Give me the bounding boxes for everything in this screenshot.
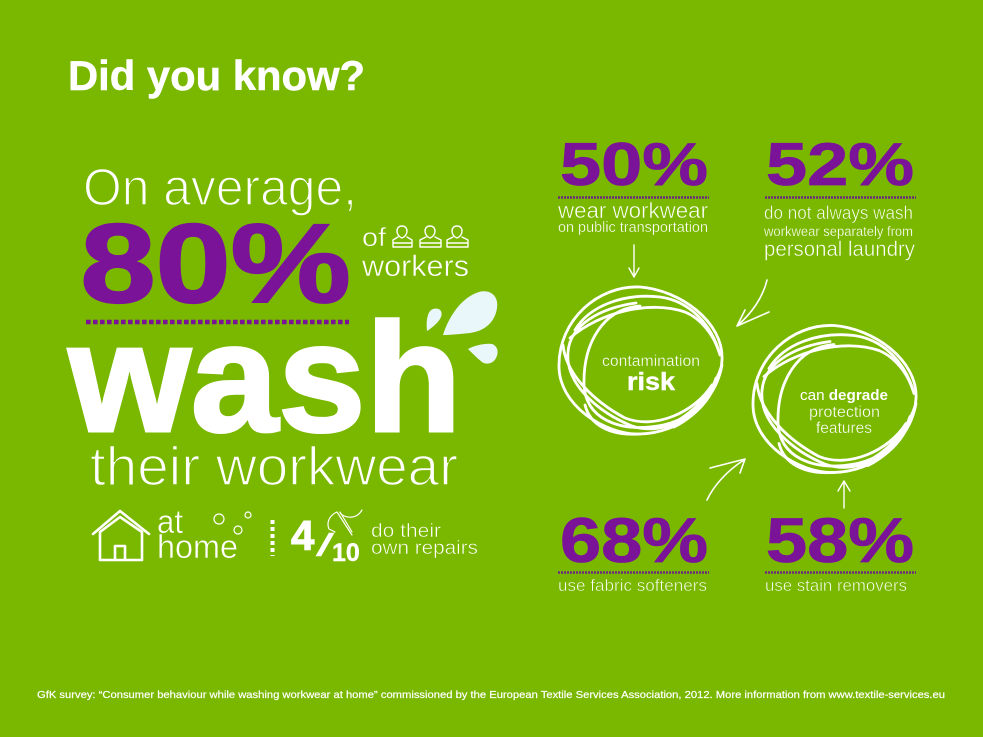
dotted separator: [270, 520, 274, 556]
icon: water drops: [427, 291, 498, 364]
text: workers: workers: [361, 250, 469, 283]
text: on average: On average,: [83, 159, 357, 217]
stat: 52%: personal laundry: [764, 238, 915, 261]
panel: repairs: own repairs: [371, 538, 478, 559]
text: contamination risk: contamination: [602, 353, 700, 370]
text: at home: at: [157, 503, 183, 540]
stat: 52%: workwear separately from: [763, 224, 913, 239]
stat: 52%: [763, 131, 916, 261]
icon: needle and thread: [328, 510, 362, 535]
fraction: 4 of 10: [291, 512, 360, 567]
stat: 52%: 52%: [766, 131, 914, 198]
text: of: of: [362, 222, 387, 252]
stat: 50%: wear workwear: [557, 198, 708, 223]
arrow: 68% to degrade: [707, 459, 745, 500]
text: can degrade protection features: [800, 388, 888, 437]
panel: contamination risk: [559, 287, 722, 434]
text: contamination risk: risk: [627, 368, 675, 396]
panel: repairs: [291, 510, 478, 567]
text: do their own repairs: do their: [371, 521, 442, 542]
text: contamination risk: [602, 353, 700, 396]
text: can degrade protection features: can degrade: [800, 388, 888, 404]
stat: 50%: [557, 131, 709, 236]
stat: 68%: use fabric softeners: [558, 576, 707, 595]
panel: at home: [93, 503, 251, 565]
stat: 50%: on public transportation: [558, 220, 708, 236]
stat: 58%: use stain removers: [765, 576, 907, 595]
panel: at home: home: [157, 528, 238, 565]
arrow: 50% to contamination: [629, 245, 639, 277]
panel: can degrade protection features: [753, 325, 916, 473]
footer source note: GfK survey: “Consumer behaviour while washing workwear at home” commissioned by the European Textile Services Association, 2012. More information from www.textile-services.eu: [37, 689, 945, 701]
stat: 52%: do not always wash: [764, 202, 913, 223]
big number: 80%: 80%: [80, 202, 351, 326]
icon: bubbles: [214, 512, 251, 534]
stat: 58%: 58%: [766, 505, 914, 576]
text: can degrade protection features: protection: [809, 404, 880, 421]
stat: 68%: 68%: [560, 505, 708, 576]
panel: main statistic: [67, 159, 498, 497]
text: can degrade protection features: features: [816, 420, 872, 437]
arrow: 58% to degrade: [838, 481, 850, 508]
icon: house: [93, 511, 149, 560]
title: Did you know?: [68, 52, 365, 99]
headline: wash: wash: [67, 292, 462, 465]
arrow: 52% to contamination: [737, 280, 769, 326]
dotted divider: [86, 320, 349, 324]
fraction: 4 of 10: 4: [291, 512, 315, 559]
icon: workers: [393, 226, 468, 247]
stat: 50%: 50%: [560, 131, 708, 198]
icon: scribbled circle: [559, 287, 722, 434]
icon: scribbled circle: [753, 325, 916, 473]
fraction: 4 of 10: 10: [332, 539, 360, 567]
text: their workwear: their workwear: [90, 435, 458, 497]
